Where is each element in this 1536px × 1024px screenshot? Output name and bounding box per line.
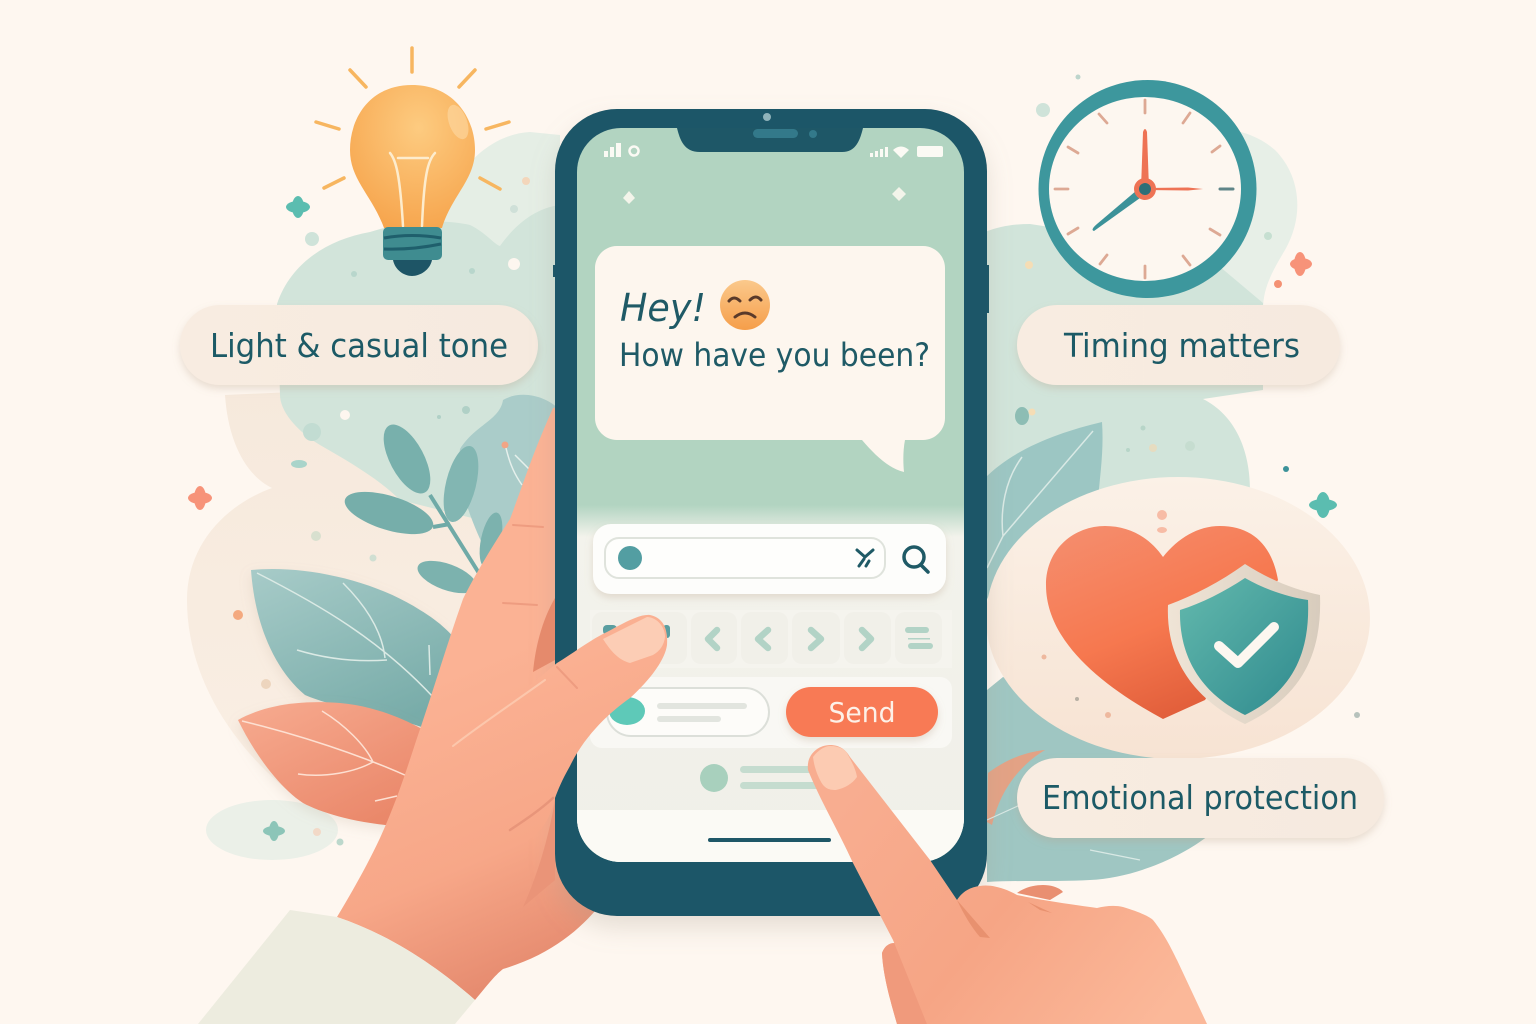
icon: light bulb xyxy=(316,48,509,276)
home indicator xyxy=(708,838,831,842)
send button xyxy=(786,687,938,737)
search panel xyxy=(593,524,946,594)
icon: clock xyxy=(1038,80,1256,298)
sparkles xyxy=(623,191,635,204)
left knuckle shade xyxy=(882,943,927,1024)
fist xyxy=(882,885,1207,1024)
icon: shield xyxy=(1168,564,1320,724)
pill: Timing matters: Timing matters xyxy=(1063,326,1300,365)
pill: Emotional protection xyxy=(1017,758,1384,838)
index finger xyxy=(808,745,1000,1024)
thumb nail xyxy=(603,617,665,663)
finger crease xyxy=(957,900,990,938)
left palm xyxy=(337,400,600,1000)
decorative accents xyxy=(188,74,1360,846)
pill: Light & casual tone xyxy=(180,305,538,385)
icon: teal clover bottom xyxy=(263,821,285,841)
icon: coral clover left xyxy=(188,486,212,510)
back finger xyxy=(1017,885,1063,900)
leaves left xyxy=(238,417,530,826)
icon: small clovers xyxy=(291,407,1036,468)
palm shading xyxy=(533,598,555,672)
send button: Send xyxy=(828,696,896,729)
icon: teal clover left xyxy=(286,196,310,218)
right hand xyxy=(808,745,1207,1024)
thumb xyxy=(450,615,667,850)
chat row xyxy=(700,764,820,792)
hand creases xyxy=(453,525,577,830)
message bubble xyxy=(595,246,945,472)
leaf: right teal upper xyxy=(985,422,1103,600)
left sleeve xyxy=(198,910,475,1024)
leaves right xyxy=(985,422,1140,860)
phone xyxy=(553,109,989,916)
left hand xyxy=(450,525,667,907)
icon: emoji xyxy=(720,280,770,330)
pill: Timing matters xyxy=(1017,305,1340,385)
text: How have you been: How have you been? xyxy=(619,336,930,374)
status bar xyxy=(604,143,943,158)
input field xyxy=(607,688,769,736)
keyboard row xyxy=(590,610,952,668)
screen xyxy=(577,128,964,862)
heart and shield panel xyxy=(986,477,1370,759)
pill: Light & casual tone: Light & casual tone xyxy=(210,326,508,365)
sprig xyxy=(430,495,482,578)
icon: coral clover right xyxy=(1290,252,1312,276)
phone body xyxy=(555,109,987,916)
text: Hey: Hey! xyxy=(620,286,706,330)
pill: Emotional protection: Emotional protection xyxy=(1042,778,1358,817)
row panel xyxy=(590,677,952,748)
lower screen xyxy=(577,505,964,862)
leaf: coral xyxy=(238,702,440,826)
side buttons xyxy=(553,265,989,313)
finger nail xyxy=(813,746,857,790)
background blobs xyxy=(187,129,1297,882)
icon: heart xyxy=(1046,526,1278,719)
leaf: large teal xyxy=(251,569,470,730)
scattered dots xyxy=(233,74,1360,846)
icon: teal clover right xyxy=(1309,492,1337,518)
leaf: right lower stripe xyxy=(987,750,1045,825)
notch xyxy=(677,128,863,152)
